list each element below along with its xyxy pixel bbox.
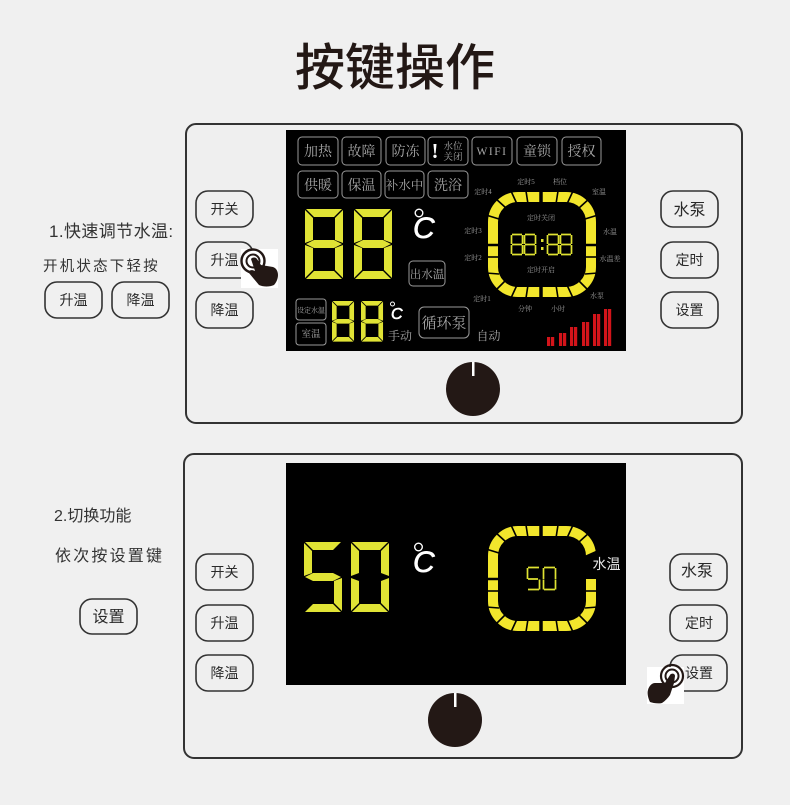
left buttons: 开关: [210, 201, 238, 217]
LCD display 1: 加热: [304, 143, 333, 160]
LCD display 1: !: [432, 139, 438, 163]
ring labels: 水泵: [590, 291, 604, 300]
LCD display 1: 出水温: [410, 267, 445, 281]
text block: step 2 instructions: 设置: [92, 608, 125, 626]
left buttons: 升温: [210, 252, 238, 268]
text block: step 1 instructions: 升温: [60, 292, 88, 308]
ring gauge with gap: [486, 525, 600, 632]
right buttons: [661, 191, 718, 328]
text block: step 1 instructions: 降温: [126, 292, 154, 308]
right buttons: 定时: [676, 252, 704, 268]
degree C: C: [413, 546, 435, 579]
ring labels: 定时1: [473, 294, 491, 303]
text block: step 2 instructions: 2.切换功能: [54, 507, 131, 525]
left buttons: 开关: [210, 564, 238, 580]
ring labels: [464, 177, 620, 313]
ring labels: 分钟: [518, 304, 532, 313]
right buttons: 设置: [685, 665, 713, 681]
big digits 50: [304, 542, 389, 612]
ring labels: 定时开启: [527, 265, 555, 274]
left buttons: [196, 191, 253, 328]
ring labels: 定时关闭: [527, 213, 555, 222]
LCD display 1: 保温: [348, 178, 376, 194]
small degree C: C: [391, 306, 403, 323]
panel: control panel 2: [184, 454, 742, 758]
small digits 50: [528, 568, 556, 590]
knob 2: [428, 693, 482, 747]
LCD display 1: 自动: [476, 328, 501, 343]
left buttons: [196, 554, 253, 691]
LCD display 2: [286, 463, 626, 685]
text block: step 1 instructions: [43, 222, 174, 318]
LCD display 1: 循环泵: [421, 315, 467, 332]
LCD display 1: 补水中: [386, 178, 423, 192]
label: water temperature: 水温: [592, 556, 620, 572]
LCD display 1: 室温: [301, 328, 321, 340]
ring labels: 定时4: [474, 187, 492, 196]
LCD display 1: 洗浴: [434, 178, 462, 194]
title: 按键操作: [295, 40, 495, 96]
text block: step 2 instructions: 依次按设置键: [55, 547, 164, 565]
ring labels: 定时5: [517, 177, 535, 186]
LCD display 1: 供暖: [304, 178, 332, 194]
LCD display 1: 水位: [443, 140, 463, 152]
icon: pressing hand 2: [647, 665, 684, 704]
LCD display 1: 手动: [388, 328, 412, 343]
left buttons: 降温: [210, 302, 238, 318]
right buttons: 水泵: [681, 562, 713, 580]
ring labels: 室温: [592, 187, 606, 196]
knob 1: [446, 362, 500, 416]
LCD display 1: 童锁: [523, 143, 552, 160]
LCD display 1: WIFI: [477, 146, 507, 158]
big digits 88: [305, 209, 392, 279]
text block: step 1 instructions: 1.快速调节水温:: [49, 222, 174, 241]
red level bars: [547, 309, 611, 346]
small digits 88: [332, 301, 383, 342]
right buttons: 水泵: [673, 201, 706, 219]
ring labels: 水温差: [600, 254, 620, 263]
ring labels: 档位: [553, 177, 567, 186]
ring labels: 定时3: [464, 226, 482, 235]
left buttons: 升温: [210, 615, 238, 631]
panel: control panel 1: [186, 124, 742, 423]
right buttons: [670, 554, 727, 691]
clock digits 88:88: [512, 234, 572, 254]
LCD display 1: 关闭: [443, 151, 463, 163]
text block: step 1 instructions: 开机状态下轻按: [43, 258, 160, 275]
right buttons: 设置: [676, 302, 704, 318]
big degree C: C: [413, 212, 435, 245]
ring labels: 定时2: [464, 253, 482, 262]
ring labels: 水温: [603, 227, 617, 236]
LCD display 1: 防冻: [392, 144, 420, 160]
LCD display 1: 授权: [568, 143, 596, 160]
left buttons: 降温: [210, 665, 238, 681]
LCD display 1: 故障: [348, 144, 376, 160]
LCD display 1: [286, 130, 626, 351]
LCD display 1: 设定水温: [297, 306, 325, 314]
icon: pressing hand 1: [241, 249, 278, 288]
ring labels: 小时: [551, 304, 565, 313]
ring gauge: [486, 191, 598, 298]
right buttons: 定时: [685, 615, 713, 631]
text block: step 2 instructions: [54, 507, 164, 634]
